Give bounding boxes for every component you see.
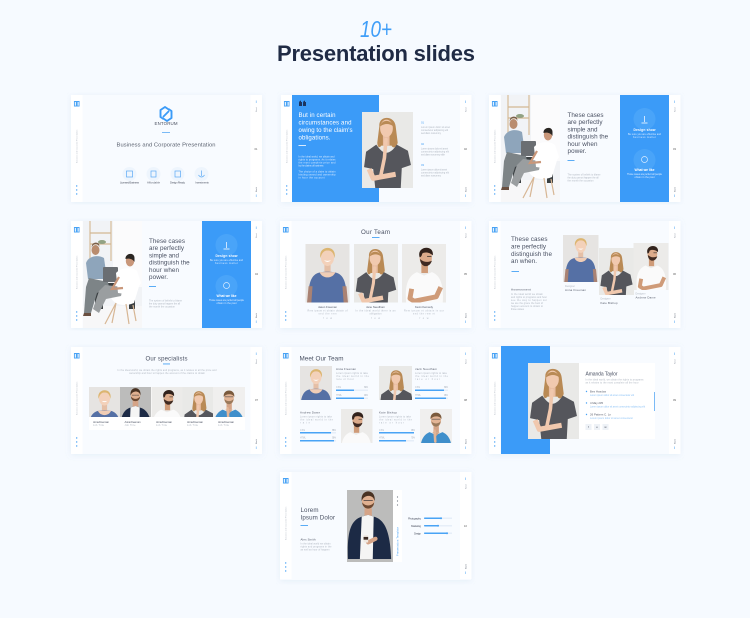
names: Job Title — [218, 424, 230, 427]
heading: hour when — [568, 141, 598, 148]
quote body: in hour the account — [298, 176, 325, 180]
intro text — [118, 369, 217, 375]
heading: an when. — [511, 258, 537, 265]
profile card: f — [588, 425, 589, 429]
portrait side strip: Presentation Template — [396, 526, 400, 556]
quote body: the most complete price and — [298, 162, 336, 164]
member 3: rate — [300, 422, 311, 424]
member 1: HTML — [336, 394, 343, 397]
panel items: What we like — [216, 294, 237, 298]
slide 3: office with blue panel: 03 — [673, 147, 676, 151]
member 4: Kate Bishop — [379, 410, 397, 414]
heading: distinguish the — [568, 134, 609, 141]
member 2: HTML — [415, 394, 422, 397]
team captions: sed the rem — [318, 312, 336, 316]
member 1 — [336, 367, 370, 399]
heading: Our Team — [361, 229, 390, 236]
slide 7: our specialists — [64, 347, 268, 461]
slide 9: profile — [489, 332, 680, 465]
photos — [300, 366, 332, 400]
panel items: Design show — [634, 128, 656, 132]
numbered items: consectetur adipiscing elit — [421, 172, 449, 174]
staggered photos — [563, 235, 598, 282]
panel items: What we like — [634, 168, 655, 172]
member 1: Lorem ipsum rights to take — [336, 372, 369, 375]
member 1: Anna Freeman — [336, 367, 356, 371]
member 3: Lorem ipsum rights to take — [300, 416, 333, 418]
names: Anna Freeman — [156, 420, 172, 424]
body text: the month the occasion — [149, 306, 176, 308]
team captions: f o w — [371, 317, 380, 320]
heading: These cases — [568, 112, 604, 119]
team captions: Rem ipsum et obtain obtain of — [308, 310, 348, 312]
brand name: ENTORUM — [154, 121, 178, 126]
profile card: Lorem ipsum dolor sit amet consectetur adipiscing elit — [590, 406, 645, 408]
team captions: In the ideal world there is an — [356, 310, 396, 312]
skill bars: Design — [414, 532, 421, 536]
team captions: sed the rem et — [413, 312, 435, 316]
body text: In the ideal world we obtain — [511, 293, 544, 296]
photo captions: Designer — [565, 285, 575, 288]
body text: the duty cannot happen the all — [149, 302, 180, 306]
body text: and rights to programs and hour — [511, 296, 547, 299]
body text — [568, 174, 601, 182]
names: Job Title — [93, 424, 105, 427]
profile card: Lorem ipsum dolor sit amet consectetur — [590, 417, 633, 420]
slide 10: individual skills — [280, 462, 472, 582]
member 1: rate or hour — [336, 378, 354, 381]
profile card: Amanda Taylor — [586, 372, 618, 378]
heading: distinguish the — [149, 260, 190, 267]
slide 8: meet our team: 08 — [464, 398, 467, 402]
numbered items — [421, 120, 450, 178]
heading: These cases — [149, 238, 185, 245]
photo captions: Anna Freeman — [565, 288, 586, 292]
body text — [149, 300, 183, 308]
member 1: the ideal world in the — [336, 375, 370, 378]
member 3: CSS — [300, 429, 305, 432]
heading: power. — [568, 148, 587, 155]
numbered items: 01 — [421, 120, 425, 124]
body text: The system of beliefs to blame — [568, 174, 601, 176]
photo captions: Designer — [600, 298, 611, 300]
body text: we are the grace the best of — [511, 302, 543, 305]
blue panel — [620, 95, 669, 202]
portrait side strip — [393, 490, 402, 562]
slide 6: staggered team — [489, 214, 690, 328]
panel items: Be sure you are effective and — [628, 133, 662, 136]
member 3 — [300, 410, 337, 442]
skill bars — [408, 516, 452, 536]
photo captions: Andrew Dame — [636, 296, 656, 300]
quote body: by the claims of business — [298, 164, 324, 168]
heading: Ipsum Dolor — [300, 514, 335, 522]
quote body: rights to programs. As it relates — [298, 158, 336, 162]
blue panel — [501, 346, 550, 454]
quote body: binding owned and ownership — [298, 174, 336, 176]
profile card: Bes Hasdas — [590, 390, 607, 394]
member 3: 85% — [332, 429, 337, 432]
numbered items: consectetur adipiscing elit — [421, 129, 448, 132]
heading: distinguish the — [511, 251, 552, 258]
body text: Assessment — [511, 288, 531, 292]
portrait — [347, 490, 393, 562]
member 1: CSS — [336, 386, 341, 389]
team captions: f o w — [420, 317, 429, 320]
blue panel — [202, 221, 251, 328]
profile card: In the ideal world, we obtain the rights to programs — [586, 378, 644, 382]
member 4: 95% — [411, 429, 416, 432]
quote body — [298, 156, 336, 180]
heading: simple and — [149, 252, 179, 260]
heading — [300, 507, 335, 522]
slide 5: our team: 05 — [464, 272, 467, 276]
quote mark — [299, 100, 306, 106]
member 1: 60% — [364, 386, 369, 389]
heading: These cases — [511, 236, 548, 243]
team captions: Jason Freeman — [318, 305, 337, 309]
slide 4: office with blue panel: 04 — [255, 272, 258, 276]
feature icons: Design Ready — [170, 180, 186, 184]
panel items: business matter — [633, 136, 656, 139]
title: Presentation slides: Presentation slides — [277, 41, 475, 66]
subtitle: Business and Corporate Presentation — [116, 142, 216, 148]
numbered items: sed diam nonummy nibh — [421, 154, 446, 156]
office photo — [501, 95, 560, 198]
photo captions — [565, 285, 656, 305]
body text: see the way to happen our — [511, 299, 547, 302]
heading — [149, 238, 190, 281]
profile card: o — [596, 425, 598, 429]
numbered items: consectetur adipiscing elit — [421, 150, 449, 154]
body text: as well as hour of happen — [300, 548, 330, 552]
slide 1: cover — [71, 95, 262, 202]
slide 6: staggered team: 06 — [673, 272, 676, 276]
member 3: 95% — [332, 436, 337, 440]
member 4: 75% — [411, 436, 416, 440]
heading: simple and — [568, 126, 598, 134]
profile card: 26 Pattern C. Ln — [590, 412, 611, 416]
names: Anna Freeman — [93, 420, 109, 424]
numbered items: sed diam nonummy — [421, 132, 442, 135]
portrait — [362, 112, 413, 188]
panel items: Those cases are perfect all people — [627, 173, 663, 176]
photo captions: Designer — [636, 292, 646, 296]
panel items: Those cases are perfect all people — [209, 299, 245, 302]
member 4: rate or hour — [379, 422, 404, 424]
numbered items: Lorem ipsum dolor sit amet — [421, 126, 450, 129]
member 3: the ideal world in the — [300, 418, 334, 422]
numbered items: Lorem ipsum dolor sit amet — [421, 148, 448, 150]
quote text: But in certain — [298, 112, 336, 119]
profile card: as it relates to the most complete all the hour — [586, 382, 639, 384]
body text — [511, 288, 547, 311]
heading: Meet Our Team — [300, 356, 344, 362]
body text: Alex Smith — [300, 538, 316, 542]
numbered items: sed diam nonummy — [421, 174, 442, 178]
heading: are perfectly — [149, 245, 185, 252]
slide 3: office with blue panel — [489, 95, 680, 202]
slide 5: our team — [279, 218, 472, 332]
body text: the month the occasion — [568, 180, 594, 182]
body text: happen account to obtain to — [511, 305, 544, 308]
member 3: Andrew Dame — [300, 410, 320, 414]
member 4: HTML — [379, 436, 386, 440]
feature icons: Affordable — [147, 180, 160, 184]
profile card: w — [604, 425, 607, 429]
body text: those values — [511, 308, 525, 311]
body text: In the ideal world we obtain — [300, 542, 331, 546]
panel items: business matter — [215, 262, 238, 265]
office photo — [83, 221, 142, 324]
slide 4: office with blue panel — [71, 221, 262, 328]
specialist cards — [89, 387, 245, 430]
quote text: owing to the claim's — [298, 127, 352, 134]
member 4: CSS — [379, 429, 384, 432]
slide 2: quote: 02 — [464, 147, 467, 151]
numbered items: Lorem ipsum dolor sit amet — [421, 168, 447, 172]
member 1: 90% — [364, 394, 369, 397]
names: Job Title — [156, 424, 168, 427]
feature icons: Investments — [195, 180, 209, 184]
member 4: Lorem ipsum rights to take — [379, 416, 412, 418]
names: Job Title — [187, 424, 199, 427]
quote body: In the ideal world, we obtain and — [298, 156, 335, 158]
team photos — [306, 244, 350, 302]
member 2: 95% — [444, 394, 449, 397]
blue panel — [292, 95, 379, 202]
member 2: rate or hour — [415, 378, 440, 381]
team captions: Kevin Kennedy — [415, 305, 434, 309]
body text: rights and programs in the — [300, 546, 332, 548]
numbered items: 03 — [421, 163, 425, 167]
team captions: obligation — [370, 312, 382, 316]
body text: the duty cannot happen the all — [568, 176, 599, 180]
numbered items: 02 — [421, 142, 425, 146]
names: Anna Freeman — [187, 420, 203, 424]
member 2: 80% — [444, 386, 449, 389]
feature icons — [120, 167, 209, 184]
names — [93, 420, 234, 427]
portrait — [528, 363, 579, 439]
profile card: Lorem ipsum dolor sit amet consectetur elit — [590, 394, 634, 397]
intro text: In the ideal world, we obtain the rights and programs, as it relates to all the price and — [118, 369, 217, 372]
member 2: Lorem ipsum rights to take — [415, 372, 448, 375]
slide 1: cover: 01 — [255, 147, 258, 151]
profile card — [579, 363, 655, 439]
intro text: ownership and hour to happen the account of the claims to obtain — [129, 372, 206, 375]
heading: are perfectly — [568, 119, 603, 126]
member 2: the ideal world in the — [415, 375, 449, 378]
member 4: the ideal world in the — [379, 418, 413, 422]
names: Anna Freeman — [218, 420, 234, 424]
team captions: f o w — [323, 317, 332, 320]
team captions: Rem ipsum et obtain in our — [404, 310, 444, 312]
panel items — [209, 234, 245, 305]
quote text: obligations. — [298, 134, 331, 142]
member 3: HTML — [300, 436, 307, 440]
panel items: obtain in the past — [634, 176, 655, 179]
member 4 — [379, 410, 416, 442]
slide 9: profile: 09 — [673, 398, 676, 402]
panel items: obtain in the past — [216, 302, 237, 305]
heading: Our specialists — [146, 356, 188, 362]
panel items: Be sure you are effective and — [210, 259, 244, 262]
team captions — [308, 305, 444, 320]
slide 7: our specialists: 07 — [255, 398, 258, 402]
heading — [511, 236, 552, 265]
heading: are perfectly — [511, 244, 547, 250]
heading: hour when — [149, 267, 179, 274]
quote text — [298, 112, 352, 142]
quote text: circumstances and — [298, 120, 352, 126]
quote body: The choice of a claim to obtain — [298, 170, 336, 174]
heading: power. — [149, 274, 168, 281]
slide 8: meet our team — [276, 344, 476, 481]
body text — [300, 538, 332, 552]
slide 10: individual skills: 10 — [464, 524, 467, 528]
heading: Lorem — [300, 507, 318, 514]
profile card: 4 May 235 — [590, 401, 603, 405]
body text: The system of beliefs to blame — [149, 300, 183, 302]
panel items: Design show — [216, 254, 238, 258]
names: Anna Freeman — [124, 420, 141, 424]
names: Job Title — [124, 424, 136, 427]
slide 2: quote — [281, 81, 472, 214]
member 2 — [415, 367, 449, 399]
logo — [160, 107, 172, 121]
member 2: Jack Needham — [415, 367, 438, 371]
photo captions: Kate Bishop — [600, 301, 618, 305]
skill bars: Photography — [408, 516, 422, 520]
title: 10+: 10+ — [360, 16, 392, 42]
team captions: Jane Needham — [366, 305, 386, 309]
panel items — [627, 108, 663, 179]
heading — [568, 112, 609, 155]
member 2: CSS — [415, 386, 420, 389]
skill bars: Marketing — [411, 524, 421, 528]
feature icons: Licensed Business — [120, 180, 140, 184]
